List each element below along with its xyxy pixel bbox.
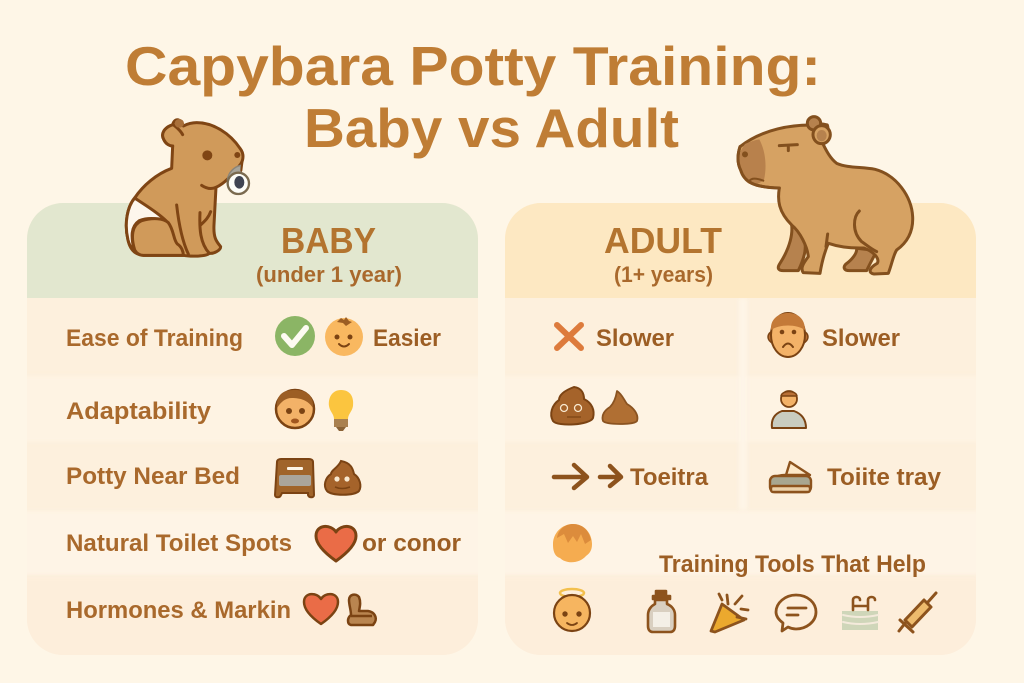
panel: baby (20, 203, 490, 667)
text: toilet tray: Toiite tray (827, 464, 942, 491)
heading: baby: BABY (281, 220, 376, 261)
label: adaptability: Adaptability (66, 398, 212, 425)
icon: plain poop (602, 391, 637, 424)
icon: child face (276, 390, 314, 428)
text: slower: Slower (596, 325, 674, 352)
icon: angel baby (554, 589, 590, 631)
icon: bottle (648, 591, 675, 632)
text: easier: Easier (373, 325, 441, 352)
icon: marking figure (348, 595, 376, 625)
illustration: baby capybara with diaper and pacifier (126, 119, 249, 256)
icon: party popper (711, 594, 748, 632)
icon: light bulb (329, 390, 353, 431)
icon: orange blob (553, 524, 592, 562)
icon: baby face (325, 317, 363, 356)
icon: poop with eyes (551, 387, 594, 425)
baby header band (27, 203, 478, 298)
heading: adult (604, 220, 722, 287)
icon: sad adult face (768, 313, 808, 357)
panel: adult (500, 203, 980, 667)
icon: large heart (316, 526, 356, 561)
icon: pool (842, 597, 878, 630)
adult header band (505, 203, 976, 298)
heading: adult: (1+ years) (614, 262, 713, 287)
icon: bed (275, 459, 314, 497)
icon: small heart (304, 594, 338, 624)
title: Capybara Potty Training: (125, 35, 821, 97)
title: Baby vs Adult (304, 97, 679, 159)
label: natural toilet spots: Natural Toilet Spots (66, 530, 292, 557)
icon: double arrow (554, 465, 621, 488)
text: slower: Slower (822, 325, 900, 352)
label: ease of training: Ease of Training (66, 325, 243, 352)
heading: baby: (under 1 year) (256, 262, 402, 287)
heading: adult: ADULT (604, 220, 722, 261)
heading: baby (256, 220, 402, 287)
icon: person in shirt (772, 391, 806, 428)
heading: training tools: Training Tools That Help (659, 551, 926, 578)
icon: orange cross (557, 325, 581, 348)
icon: toilet tray (770, 462, 811, 492)
icon: speech bubble (776, 595, 816, 631)
icon: syringe (899, 593, 936, 632)
label: hormones and marking: Hormones & Markin (66, 597, 291, 624)
icon: green check (275, 316, 315, 356)
text: toeitra: Toeitra (630, 464, 709, 491)
title (125, 35, 821, 159)
icon: smiling poop (325, 461, 360, 495)
label: potty near bed: Potty Near Bed (66, 463, 240, 490)
text: or conor: or conor (362, 530, 461, 557)
illustration: adult capybara (738, 117, 913, 274)
